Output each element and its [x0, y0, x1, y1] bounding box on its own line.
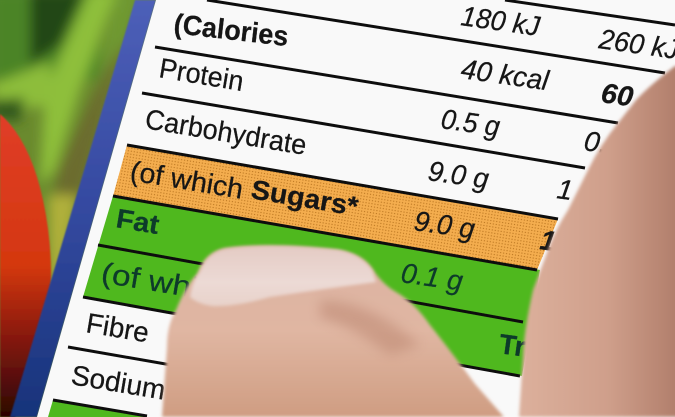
row labels: (Calories	[172, 8, 290, 52]
green fat bands	[83, 196, 540, 376]
values: 60	[599, 77, 636, 112]
thumb	[162, 245, 504, 417]
row labels: Sodium	[69, 359, 168, 406]
row labels: (of which	[128, 155, 246, 205]
row labels: Carbohydrate	[143, 103, 309, 161]
row labels: (of whi	[99, 257, 201, 305]
row labels: Protein	[157, 52, 246, 97]
thumb body	[162, 245, 504, 417]
green bottom band	[48, 400, 147, 417]
row labels: Fibre	[84, 307, 151, 348]
values: Tr	[497, 328, 528, 363]
values: 1	[555, 173, 575, 206]
values: 40 kcal	[459, 53, 551, 96]
values: 0.1 g	[399, 257, 465, 297]
orange sugars band	[113, 145, 558, 270]
index finger	[519, 66, 675, 417]
values: 9.0 g	[412, 205, 477, 244]
values: 0.5 g	[439, 103, 502, 142]
thumb creases	[320, 300, 420, 355]
values: 9.0 g	[426, 155, 491, 194]
row labels: Sugars*	[249, 174, 361, 222]
tomato	[0, 114, 51, 417]
values: 180 kJ	[459, 0, 543, 42]
row labels: Fat	[114, 203, 161, 240]
values: 0.	[582, 125, 610, 159]
row labels	[69, 8, 361, 406]
background: lettuce	[0, 0, 170, 417]
values	[399, 0, 675, 363]
thumb nail	[190, 246, 376, 306]
values: 1	[538, 224, 558, 257]
blue border strip	[10, 0, 156, 417]
